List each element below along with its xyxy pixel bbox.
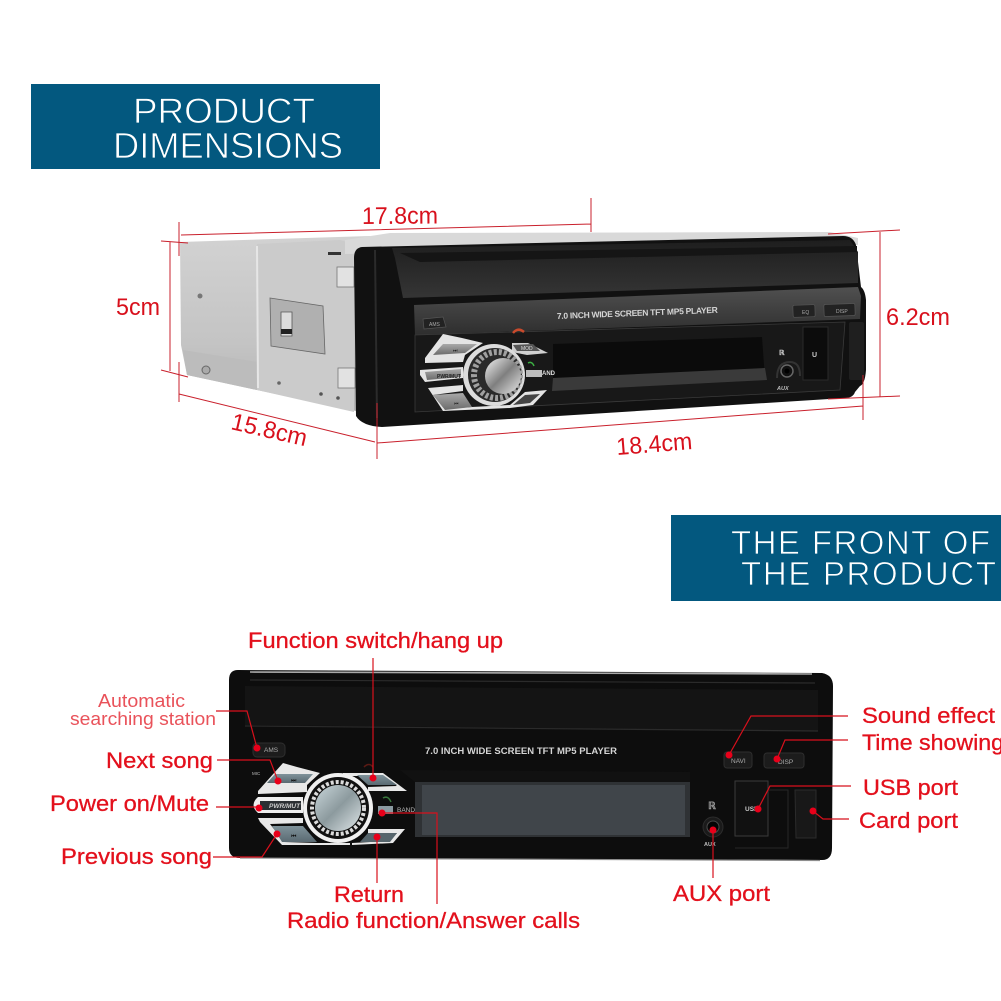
dimension: 6.2cm [828,230,950,399]
label: automatic searching station: searching station [70,709,216,729]
label: AUX port: AUX port [673,881,770,906]
buttons NAVI DISP AMS: MIC [252,771,261,776]
button cluster: BAND [397,807,415,814]
button cluster: ⏭ [291,778,297,784]
label: time showing: Time showing [862,730,1001,755]
label: card port: Card port [859,808,958,833]
label: next song [106,748,282,784]
label: function switch/hang up [248,628,503,782]
USB door: USB [745,806,759,813]
heading: product dimensions: PRODUCT [133,92,315,131]
panel divider [400,770,690,784]
label: automatic searching station [70,691,260,752]
buttons AMS EQ DISP: DISP [836,309,848,315]
button cluster: ⏭ [453,348,458,354]
dimension: 18.4cm: 18.4cm [615,428,693,461]
label: previous song [61,830,280,869]
grey upper band [414,287,861,335]
buttons NAVI DISP AMS [252,743,804,776]
top edge highlight [345,232,858,254]
button cluster: AND [542,371,556,377]
label: sound effect [726,703,995,758]
buttons AMS EQ DISP: AMS [429,322,440,328]
flip-down screen cover [392,240,858,298]
button cluster: PWR/MUT [437,374,461,380]
heading: the front of the product: THE FRONT OF [731,524,990,561]
dimension: 5cm: 5cm [116,294,160,321]
button cluster [254,763,415,845]
volume knob [303,773,373,843]
button cluster: ⏮ [291,834,297,840]
button cluster: MOD [521,346,533,352]
button cluster: PWR/MUT [269,803,301,810]
flip cover lines [245,686,818,731]
label: previous song: Previous song [61,844,212,869]
label: sound effect: Sound effect [862,703,995,728]
label: AUX port [673,826,770,906]
heading: product dimensions: DIMENSIONS [113,125,343,166]
black front shell [354,236,866,427]
label: automatic searching station: Automatic [98,691,185,711]
AUX jack: ℝ [708,801,717,812]
dimension: 5cm [116,241,188,377]
card slot [795,790,816,838]
label: power on/mute: Power on/Mute [50,791,209,816]
product photo: head unit in perspective [180,232,866,427]
hang-up glyph [513,330,524,333]
dimension: 6.2cm: 6.2cm [886,304,950,331]
label: USB port: USB port [863,775,958,800]
button cluster: ⏮ [454,401,459,407]
buttons AMS EQ DISP [423,303,855,329]
heading: product dimensions [31,84,380,169]
label: next song: Next song [106,748,213,773]
AUX jack and USB door: AUX [776,386,789,392]
AUX jack and USB door [776,322,864,392]
dimension: 15.8cm: 15.8cm [229,409,310,452]
body [229,670,833,860]
label: radio function/answer calls [287,810,580,933]
label: return [334,834,404,907]
label: radio function/answer calls: Radio function/Answer calls [287,908,580,933]
metal chassis side [180,236,370,414]
model text: 7.0 INCH WIDE SCREEN TFT MP5 PLAYER [557,305,718,321]
AUX jack: AUX [704,842,716,848]
display [415,782,690,837]
label: return: Return [334,882,404,907]
buttons AMS EQ DISP: EQ [802,310,809,316]
buttons NAVI DISP AMS: NAVI [731,758,746,765]
label: time showing [774,730,1001,762]
dimension: 18.4cm [377,375,863,461]
label: function switch/hang up: Function switch/hang up [248,628,503,653]
USB door [735,781,788,848]
label: power on/mute [50,791,262,816]
volume knob [463,344,525,406]
heading: the front of the product: THE PRODUCT [741,555,996,592]
button cluster [420,334,556,411]
dimension: 17.8cm: 17.8cm [362,202,438,230]
AUX jack and USB door: ℝ [779,349,785,357]
AUX jack and USB door: U [812,352,817,359]
label: USB port [754,775,958,812]
buttons NAVI DISP AMS: AMS [264,747,279,754]
product photo: front view [229,670,833,860]
dimension: 17.8cm [179,198,591,256]
label: card port [810,808,958,833]
AUX jack [703,801,723,848]
buttons NAVI DISP AMS: DISP [778,759,793,766]
dimension: 15.8cm [179,362,377,459]
lower screen area [415,322,845,412]
heading: the front of the product [671,515,1001,601]
model text: 7.0 INCH WIDE SCREEN TFT MP5 PLAYER [425,746,617,757]
